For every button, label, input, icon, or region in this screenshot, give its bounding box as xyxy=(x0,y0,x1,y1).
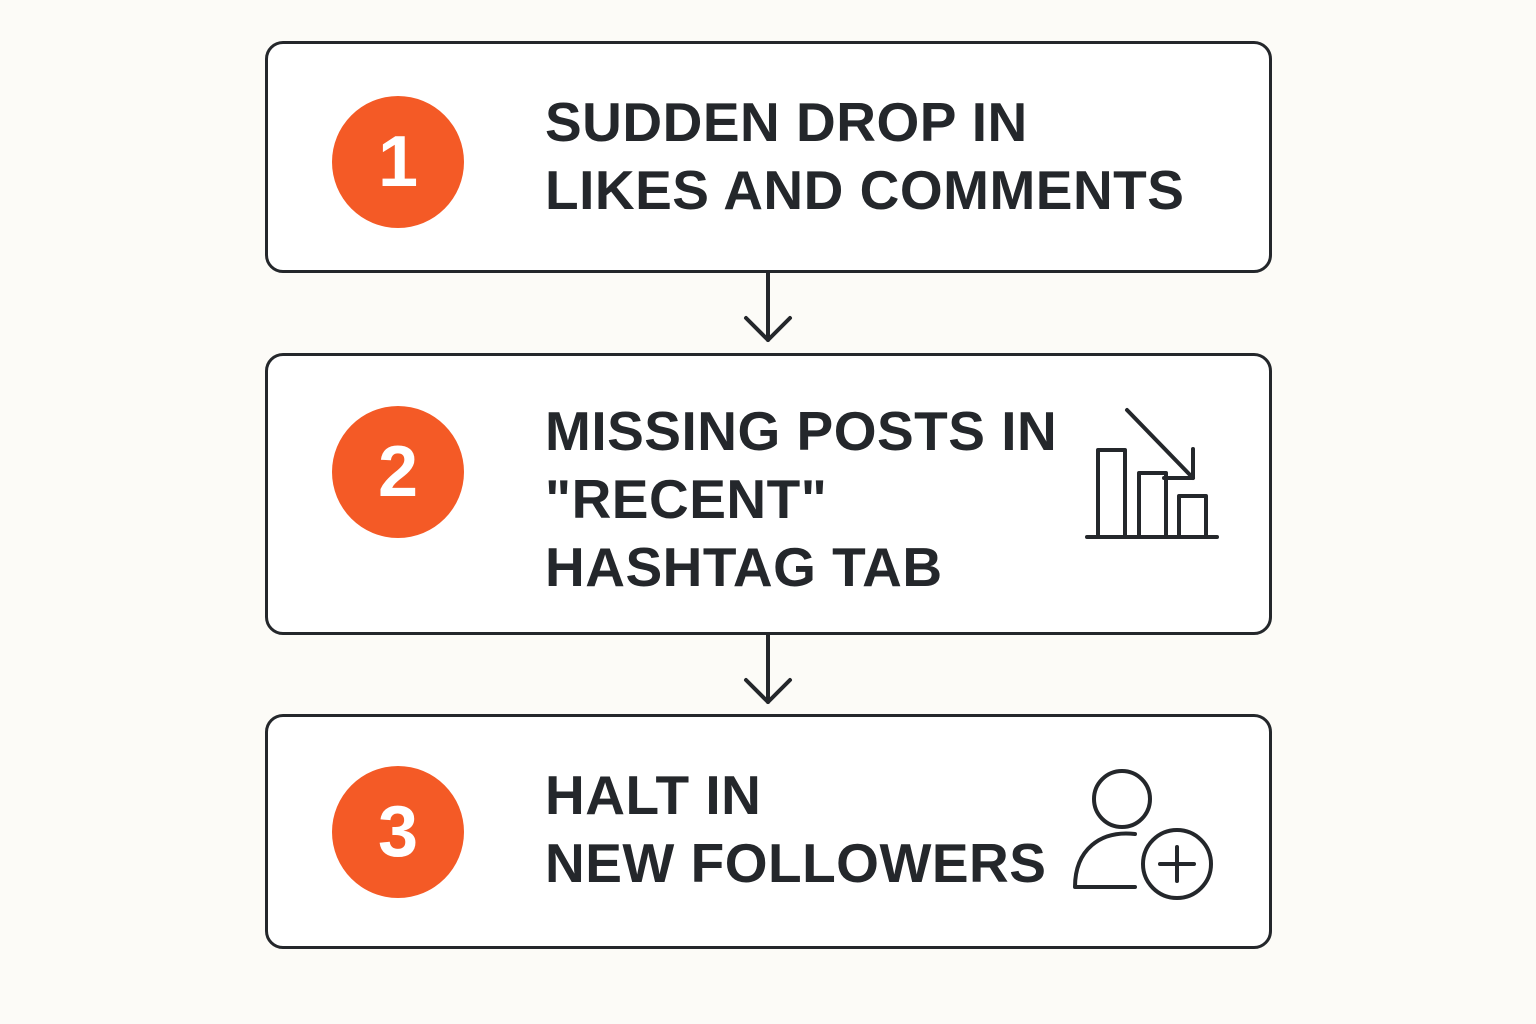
text: step 2: MISSING POSTS IN xyxy=(545,400,1057,462)
badge 3: 3 xyxy=(378,792,418,872)
arrow 2 xyxy=(746,635,790,702)
badge 1 xyxy=(332,96,464,228)
text: step 1 xyxy=(545,91,1184,221)
text: step 1: SUDDEN DROP IN xyxy=(545,91,1028,153)
panel: step 2 xyxy=(265,353,1272,635)
panel: step 1 xyxy=(265,41,1272,273)
badge 3 xyxy=(332,766,464,898)
icon: add follower xyxy=(1075,771,1211,898)
icon: declining bar chart xyxy=(1087,410,1217,537)
text: step 1: LIKES AND COMMENTS xyxy=(545,159,1184,221)
text: step 3 xyxy=(545,764,1046,894)
text: step 2: "RECENT" xyxy=(545,468,827,530)
panel: step 3 xyxy=(265,714,1272,949)
badge 2 xyxy=(332,406,464,538)
text: step 3: HALT IN xyxy=(545,764,761,826)
arrow 1 xyxy=(746,273,790,340)
badge 2: 2 xyxy=(378,432,418,512)
text: step 3: NEW FOLLOWERS xyxy=(545,832,1046,894)
text: step 2 xyxy=(545,400,1057,598)
badge 1: 1 xyxy=(378,122,418,202)
text: step 2: HASHTAG TAB xyxy=(545,536,943,598)
